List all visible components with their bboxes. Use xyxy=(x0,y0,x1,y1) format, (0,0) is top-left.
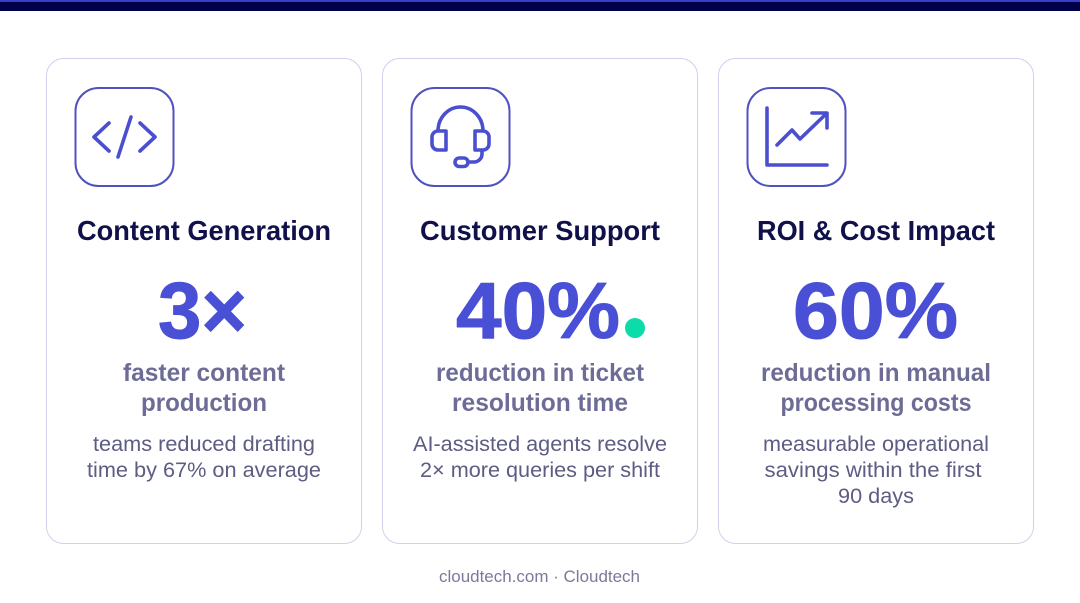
panel: customer support xyxy=(382,58,698,544)
panel: roi and cost impact xyxy=(718,58,1034,544)
top bar xyxy=(0,0,1080,11)
stat: 60%: 60% xyxy=(793,266,958,355)
heading: roi and cost impact: ROI & Cost Impact xyxy=(757,215,995,246)
icon: code brackets xyxy=(76,88,174,186)
description: drafting time: time by 67% on average xyxy=(87,459,321,482)
description: agents: 2× more queries per shift xyxy=(420,459,660,482)
stat: 40%: 40% xyxy=(456,266,620,355)
panel: content generation xyxy=(46,58,362,544)
subheading: faster content production: production xyxy=(141,389,267,417)
description: agents xyxy=(413,433,667,482)
icon: headset xyxy=(412,88,510,186)
subheading: faster content production xyxy=(123,359,286,417)
description: savings xyxy=(763,433,989,508)
subheading: manual processing costs: reduction in manual xyxy=(761,359,991,387)
accent dot xyxy=(625,318,645,338)
description: savings: 90 days xyxy=(838,485,914,508)
description: savings: savings within the first xyxy=(764,459,982,482)
subheading: reduction in ticket resolution time: reduction in ticket xyxy=(436,359,645,387)
subheading: manual processing costs: processing costs xyxy=(780,389,972,417)
heading: customer support: Customer Support xyxy=(420,215,660,246)
subheading: faster content production: faster content xyxy=(123,359,286,387)
subheading: manual processing costs xyxy=(761,359,991,417)
heading: content generation: Content Generation xyxy=(77,215,331,246)
footer: cloudtech.com · Cloudtech xyxy=(439,567,640,586)
stat: 3x: 3× xyxy=(158,266,247,355)
description: drafting time xyxy=(87,433,321,482)
subheading: reduction in ticket resolution time: resolution time xyxy=(452,389,628,417)
description: savings: measurable operational xyxy=(763,433,989,456)
icon: growth chart xyxy=(748,88,846,186)
description: agents: AI-assisted agents resolve xyxy=(413,433,667,456)
subheading: reduction in ticket resolution time xyxy=(436,359,645,417)
description: drafting time: teams reduced drafting xyxy=(93,433,315,456)
